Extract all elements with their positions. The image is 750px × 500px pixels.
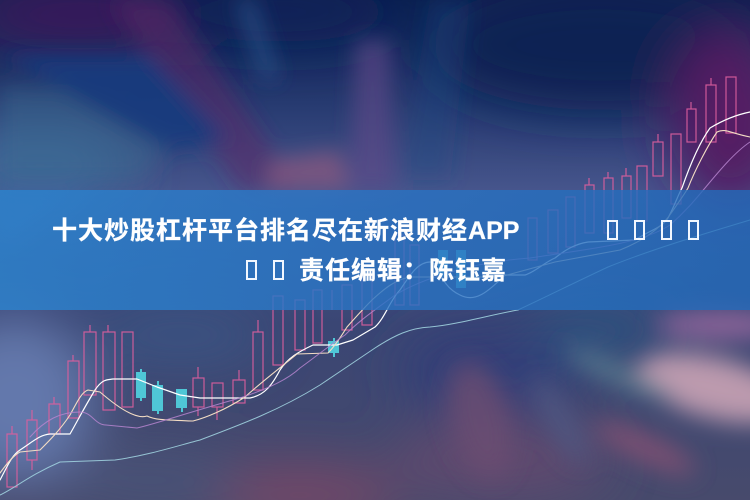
light rays: [0, 0, 470, 250]
outlined pink candles: [7, 77, 736, 487]
placeholder glyph boxes line two: [246, 260, 284, 280]
title text line one: 十大炒股杠杆平台排名尽在新浪财经APP: [52, 217, 519, 245]
placeholder glyph boxes line one: [607, 220, 699, 240]
editor credit: 责任编辑：陈钰嘉: [299, 257, 507, 285]
title band: [0, 190, 750, 310]
moving average lines: [0, 112, 750, 495]
teal candles: [136, 250, 466, 414]
